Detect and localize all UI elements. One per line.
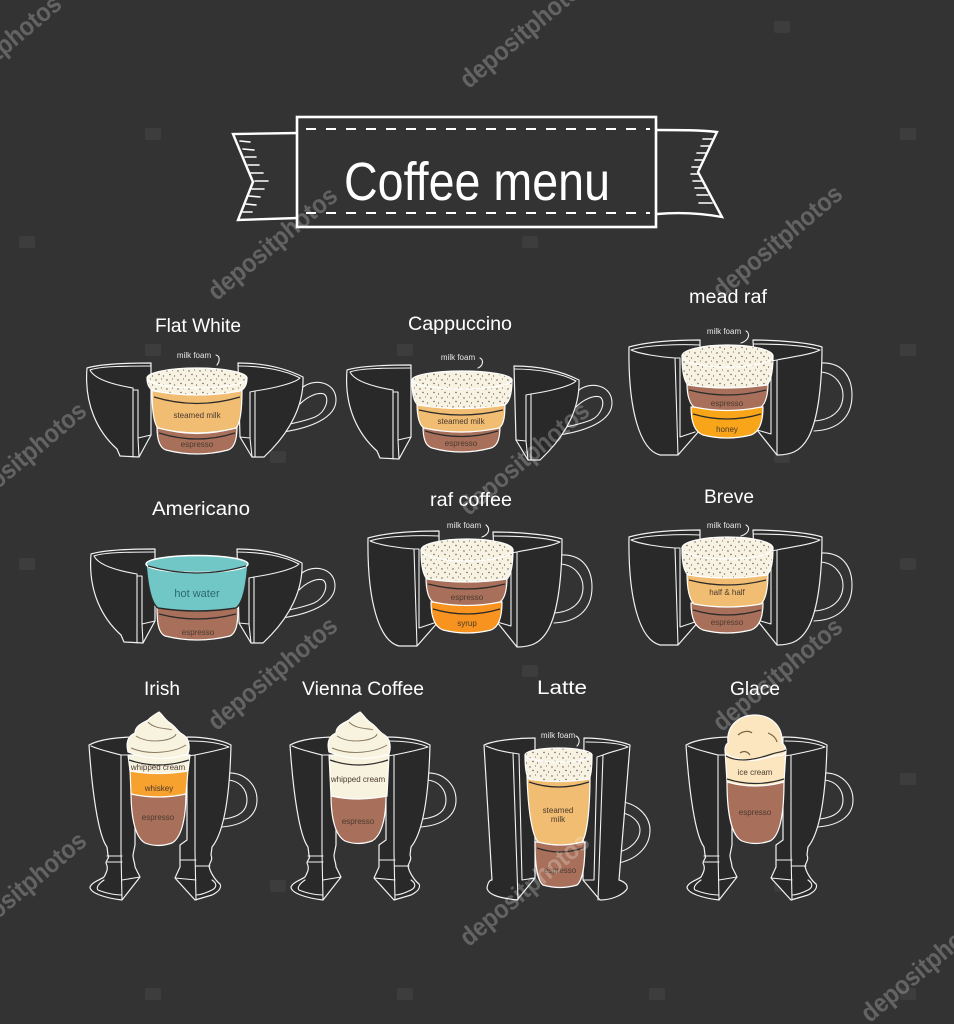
layer: honey [691,407,763,438]
label: milk foam [707,327,749,343]
layer: milk foam [682,345,773,388]
depositphotos watermarks: depositphotos [453,395,595,521]
label: milk foam: milk foam [177,351,211,360]
layer: steamed milk: steamed [543,806,573,815]
heading: mead raf [689,287,768,308]
drink: Latte [484,678,650,900]
layer: espresso [426,577,507,606]
label: milk foam [447,521,489,537]
layer: milk foam [412,371,512,408]
whipped cream swirl [127,712,189,759]
mug halves [629,340,852,455]
layer: steamed milk: milk [551,815,566,824]
layer: whiskey [130,770,188,797]
layer: milk foam [147,368,247,395]
layer: hot water [146,556,248,611]
layer: ice cream [725,750,786,786]
depositphotos watermarks: depositphotos [453,826,595,952]
depositphotos watermarks: depositphotos [201,610,343,736]
label: milk foam [707,521,749,536]
label: milk foam: milk foam [447,521,481,530]
heading: Glace [730,679,780,700]
layer: espresso [331,795,386,844]
drink: Cappuccino [347,314,612,460]
layer: espresso: espresso [181,440,214,449]
label: milk foam [177,351,219,365]
layer: espresso: espresso [711,399,744,408]
drink: Breve [629,487,852,645]
layer: steamed milk: steamed milk [173,411,222,420]
heading: raf coffee [430,490,512,511]
label: milk foam: milk foam [441,353,475,362]
layer: espresso [727,782,784,844]
layer: whipped cream band: whipped cream [130,763,185,772]
layer: hot water: hot water [174,588,220,600]
glass left half [484,738,535,900]
layer: espresso: espresso [182,628,215,637]
layer: espresso [157,608,238,640]
cup halves [91,549,335,643]
layer: milk foam [525,748,592,782]
layer: whipped cream band [128,755,190,774]
layer: steamed milk [527,776,590,845]
layer: espresso: espresso [342,817,375,826]
layer: milk foam [421,539,513,582]
heading: Flat White [155,316,241,337]
label: milk foam [441,353,482,368]
glass right half [583,738,650,900]
layer: espresso: espresso [445,439,478,448]
glass halves [290,737,456,900]
drink: Raf coffee [368,490,592,647]
whipped cream swirl [328,712,390,759]
banner box [297,117,656,227]
layer: steamed milk: steamed milk [437,417,486,426]
label: milk foam: milk foam [707,521,741,530]
layer: espresso [535,842,585,888]
layer: syrup [431,602,502,633]
depositphotos watermarks: depositphotos [706,611,848,737]
heading: Irish [144,679,180,700]
layer: espresso: espresso [739,808,772,817]
left ribbon tail [233,133,298,220]
drink: Mead raf [629,287,852,455]
layer: half and half [687,573,768,607]
cup halves [87,363,336,457]
heading: Latte [537,678,587,699]
layer: half and half: half & half [709,588,746,597]
right ribbon tail [657,130,722,217]
label: milk foam: milk foam [707,327,741,336]
mug halves [368,531,592,647]
layer: steamed milk [417,403,505,432]
drink: Glace [686,679,853,900]
glass halves [686,737,853,900]
label: milk foam: milk foam [541,731,575,740]
layer: whipped cream band [329,755,389,799]
layer: espresso [423,426,500,452]
heading: Vienna Coffee [302,679,424,700]
ice cream scoop [725,715,786,760]
layer: espresso: espresso [142,813,175,822]
title banner [233,117,722,227]
layer: espresso: espresso [711,618,744,627]
layer: honey: honey [716,425,738,434]
layer: espresso: espresso [451,593,484,602]
layer: steamed milk [152,390,242,433]
depositphotos watermarks: depositphotos [201,180,343,306]
cup halves [347,365,612,460]
layer: whiskey: whiskey [144,784,173,793]
layer: whipped cream band: whipped cream [330,775,385,784]
heading: Cappuccino [408,314,512,335]
drink: Americano [91,499,335,643]
layer: syrup: syrup [457,619,477,628]
layer: espresso [157,427,237,454]
layer: espresso [687,384,768,410]
layer: ice cream: ice cream [738,768,773,777]
title text: Coffee menu [344,152,610,212]
drink: Irish [89,679,257,900]
drink: Vienna Coffee [290,679,456,900]
stitched dashes [306,129,650,213]
label: milk foam [541,731,579,746]
heading: Breve [704,487,754,508]
depositphotos watermarks: depositphotos [706,178,848,304]
layer: espresso [131,792,186,846]
layer: espresso [691,603,763,633]
layer: milk foam [682,537,773,578]
layer: espresso: espresso [544,866,577,875]
glass halves [89,737,257,900]
heading: Americano [152,499,250,520]
mug halves [629,530,852,645]
drink: Flat White [87,316,336,457]
